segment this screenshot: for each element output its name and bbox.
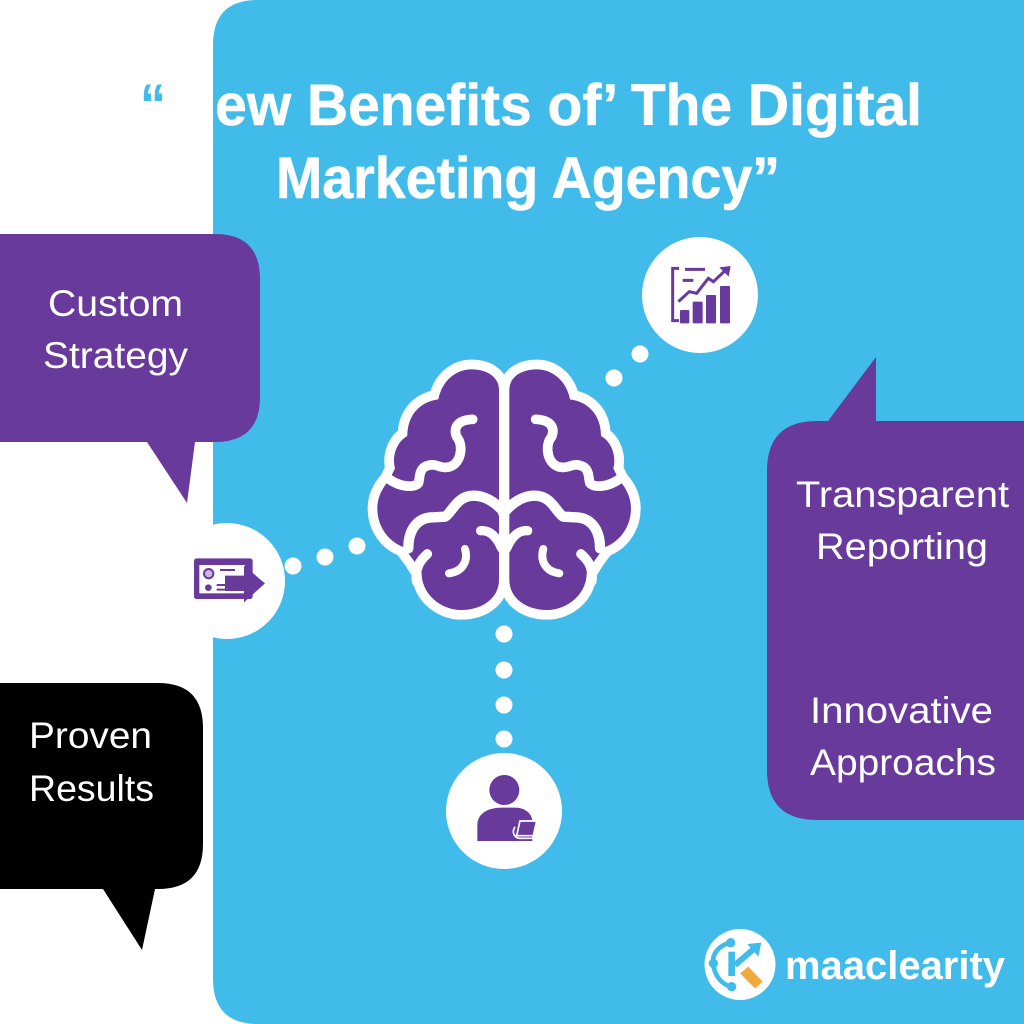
- callout: proven results: Proven: [29, 715, 152, 756]
- callout: custom strategy: [0, 234, 260, 503]
- callout: proven results: [0, 683, 203, 950]
- blue background panel: [213, 0, 1024, 1024]
- callout: custom strategy: Custom: [48, 283, 183, 324]
- logo: maaclearity: [704, 929, 1006, 1000]
- icon: growth chart: [642, 237, 758, 353]
- connector dots: person: [496, 626, 512, 748]
- icon: person with laptop: [446, 753, 562, 869]
- title: Marketing Agency”: [276, 146, 780, 211]
- logo: maaclearity: maaclearity: [785, 944, 1006, 988]
- connector dots: chart: [606, 346, 648, 386]
- title: New Benefits of’ The Digital: [174, 73, 922, 138]
- connector dots: card: [284, 538, 366, 574]
- callout: custom strategy: Strategy: [43, 335, 189, 376]
- title: [140, 73, 922, 211]
- callout: transparent reporting and innovative approaches: [767, 357, 1024, 820]
- callout: transparent reporting and innovative approaches: Approachs: [810, 742, 996, 783]
- callout: transparent reporting and innovative approaches: Reporting: [816, 526, 988, 567]
- icon: card with arrow: [169, 523, 285, 639]
- callout: proven results: Results: [29, 768, 154, 809]
- callout: transparent reporting and innovative approaches: Transparent: [796, 474, 1010, 515]
- title: “: [140, 73, 166, 138]
- icon: brain: [377, 369, 631, 610]
- callout: transparent reporting and innovative approaches: Innovative: [810, 690, 993, 731]
